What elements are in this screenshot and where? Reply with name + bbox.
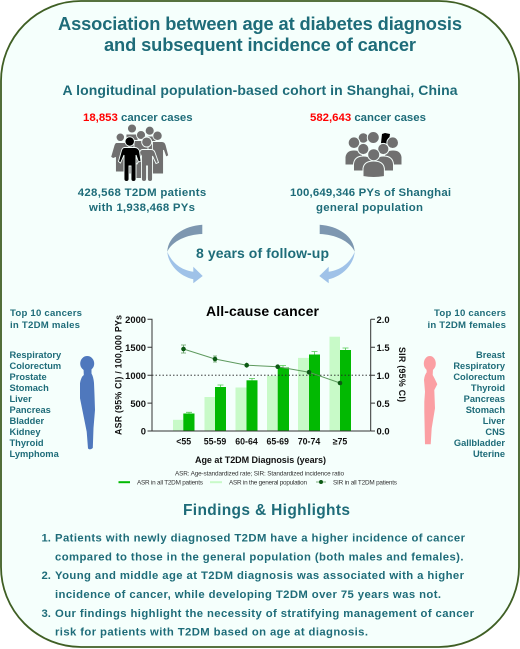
list: male cancers: Thyroid [10, 438, 44, 448]
left axis labels: 1000 [125, 370, 146, 381]
arrow: left follow-up [167, 225, 203, 283]
left axis labels: 2000 [125, 314, 146, 325]
cohort description: T2DM [78, 187, 206, 214]
x axis labels: 60-64 [235, 436, 258, 446]
line: SIR [181, 345, 342, 385]
heading: males: Top 10 cancers [10, 308, 82, 319]
list: female cancers: Pancreas [464, 394, 505, 404]
cohort description: general population [290, 187, 451, 214]
list: female cancers: Respiratory [453, 361, 506, 371]
legend: ASR in T2DM patients: ASR in all T2DM patients [137, 480, 203, 486]
finding 1: Patients with newly diagnosed T2DM have a higher incidence of cancer [55, 532, 466, 544]
right axis labels: 1.5 [376, 342, 390, 353]
icon: group of T2DM patients [111, 124, 169, 182]
list: male cancers: Liver [10, 394, 32, 404]
bars: ASR in general population [173, 337, 340, 431]
reference line at SIR 1.0 [152, 374, 371, 376]
legend: ASR in general population: ASR in the general population [229, 480, 307, 486]
heading: females: in T2DM females [428, 320, 506, 331]
cohort description: general population: 100,649,346 PYs of Shanghai [290, 187, 451, 199]
panel: general population [290, 112, 451, 214]
left axis labels: 1500 [125, 342, 146, 353]
list: male cancers: Lymphoma [10, 449, 60, 459]
cohort description: general population: general population [316, 202, 423, 214]
error bars [186, 348, 348, 414]
list: male cancers [10, 350, 62, 459]
list: female cancers: Uterine [473, 449, 505, 459]
finding 3 [42, 608, 475, 638]
list: male cancers: Bladder [10, 416, 44, 426]
finding 2: Young and middle age at T2DM diagnosis was associated with a higher [55, 570, 465, 582]
left axis labels [125, 314, 146, 436]
finding 1 [42, 532, 466, 564]
legend [118, 480, 397, 486]
x axis labels: ≥75 [333, 436, 347, 446]
cohort description: T2DM: with 1,938,468 PYs [88, 202, 195, 214]
right axis title: SIR (95% CI) [397, 347, 407, 402]
finding 2: incidence of cancer, while developing T2DM over 75 years was not. [55, 589, 441, 601]
bars: ASR in T2DM patients [183, 350, 351, 431]
chart title: All-cause cancer [206, 303, 320, 319]
title: Association between age at diabetes diagnosis [58, 13, 462, 34]
list: female cancers: Stomach [466, 405, 505, 415]
heading: findings and highlights: Findings & Highlights [183, 502, 350, 519]
follow-up label: 8 years of follow-up [196, 245, 329, 261]
x axis title: Age at T2DM Diagnosis (years) [195, 455, 326, 465]
right axis labels [376, 314, 390, 436]
cancer case count: general population: 582,643 cancer cases [310, 112, 426, 124]
list: female cancers: Gallbladder [454, 438, 505, 448]
list: male cancers: Pancreas [10, 405, 51, 415]
list: male cancers: Stomach [10, 383, 49, 393]
icon: male body [80, 356, 95, 449]
heading: males [10, 308, 82, 331]
legend: SIR in T2DM patients: SIR in all T2DM patients [333, 480, 397, 486]
finding 3: risk for patients with T2DM based on age at diagnosis. [55, 626, 368, 638]
text block: findings list [42, 532, 475, 638]
icon: female body [424, 356, 437, 444]
list: female cancers: Colorectum [453, 372, 505, 382]
list: female cancers: Thyroid [471, 383, 505, 393]
finding 3: 3. [42, 608, 51, 620]
list: female cancers [453, 350, 506, 459]
finding 2 [42, 570, 465, 601]
finding 1: 1. [42, 532, 51, 544]
list: male cancers: Colorectum [10, 361, 61, 371]
right axis labels: 0.0 [376, 426, 390, 436]
list: male cancers: Kidney [10, 427, 41, 437]
chart: all-cause cancer ASR and SIR [114, 303, 407, 465]
heading: males: in T2DM males [10, 320, 80, 331]
finding 3: Our findings highlight the necessity of stratifying management of cancer [55, 608, 475, 620]
x axis labels: <55 [176, 436, 191, 446]
right axis labels: 1.0 [376, 370, 390, 381]
right axis labels: 0.5 [376, 398, 390, 409]
right axis labels: 2.0 [376, 314, 390, 325]
x axis labels [176, 436, 347, 446]
title: and subsequent incidence of cancer [104, 34, 416, 55]
x axis labels: 70-74 [298, 436, 320, 446]
subtitle: A longitudinal population-based cohort in Shanghai, China [62, 82, 458, 98]
left axis labels: 500 [130, 398, 146, 409]
x axis labels: 65-69 [266, 436, 289, 446]
heading: females [428, 308, 506, 331]
left axis labels: 0 [141, 426, 146, 436]
list: female cancers: Liver [483, 416, 505, 426]
heading: females: Top 10 cancers [434, 308, 506, 319]
cancer case count: T2DM: 18,853 cancer cases [83, 112, 193, 124]
x axis labels: 55-59 [204, 436, 226, 446]
title [58, 13, 462, 55]
list: female cancers: Breast [476, 350, 505, 360]
panel: T2DM cohort [78, 112, 206, 214]
icon: crowd of general population [345, 132, 402, 178]
cohort description: T2DM: 428,568 T2DM patients [78, 187, 206, 199]
footnote: ASR: Age-standardized rate; SIR: Standardized incidence ratio [175, 470, 344, 478]
list: male cancers: Prostate [10, 372, 47, 382]
arrow: right follow-up [319, 225, 355, 283]
finding 1: compared to those in the general population (both males and females). [55, 552, 464, 564]
left axis title: ASR (95% CI) / 100,000 PYs [114, 315, 124, 435]
panel: top cancers in males [10, 308, 95, 459]
axes [148, 319, 375, 431]
list: female cancers: CNS [485, 427, 505, 437]
finding 2: 2. [42, 570, 51, 582]
panel: top cancers in females [424, 308, 506, 459]
list: male cancers: Respiratory [10, 350, 62, 360]
